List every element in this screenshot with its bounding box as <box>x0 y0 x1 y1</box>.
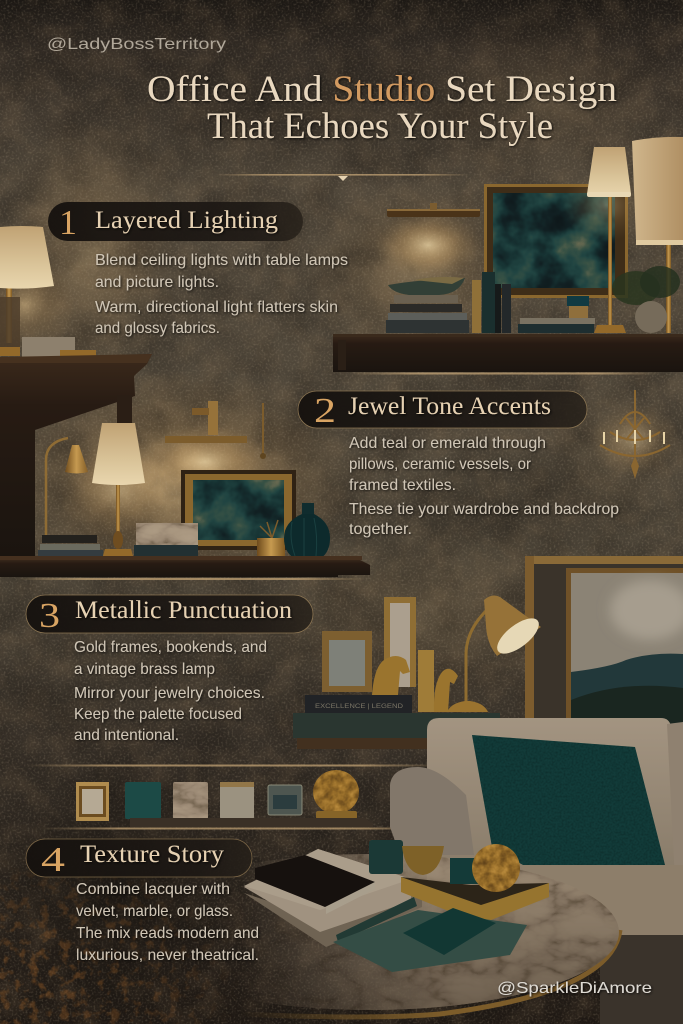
gold sphere <box>313 770 359 819</box>
text: Metallic Punctuation: Gold frames, bookends, and <box>74 639 267 656</box>
slim table lamp <box>562 147 650 333</box>
brass lamp <box>447 596 544 712</box>
text: Jewel Tone Accents: Add teal or emerald through <box>349 435 546 452</box>
text: Jewel Tone Accents: These tie your wardrobe and backdrop <box>349 501 619 518</box>
green book strip <box>336 897 417 942</box>
material swatches row <box>76 770 373 827</box>
rule above swatches <box>25 764 445 766</box>
right cushion <box>667 722 683 882</box>
scene: middle left lit vignette <box>0 401 370 577</box>
pill: 3 Metallic Punctuation: 3 <box>39 596 60 635</box>
teal glass <box>369 840 403 874</box>
brass bowl <box>402 846 444 875</box>
pill: 3 Metallic Punctuation <box>26 595 313 635</box>
scene: left lamp and corner shelf <box>0 226 152 560</box>
text: Texture Story: Combine lacquer with <box>76 881 230 898</box>
scene: large framed painting <box>525 556 683 726</box>
books under frames <box>305 695 412 713</box>
teal swatch <box>125 782 161 819</box>
text: Layered Lighting: and glossy fabrics. <box>95 320 220 337</box>
small gold frame <box>322 631 372 692</box>
rule under middle shelf <box>15 578 365 580</box>
back cushion <box>427 718 683 882</box>
picture light <box>374 203 482 279</box>
gold horse bookends <box>372 650 458 712</box>
title <box>147 69 617 147</box>
text: Layered Lighting <box>95 252 348 337</box>
marble block and brass items <box>22 337 96 357</box>
table lamp <box>0 226 75 356</box>
dark velvet fold <box>403 908 496 955</box>
shelf <box>333 334 683 372</box>
corner wood shelf <box>0 354 152 560</box>
books under frames: EXCELLENCE | LEGEND <box>315 704 404 710</box>
text: Jewel Tone Accents: together. <box>349 521 412 538</box>
text: Layered Lighting: Blend ceiling lights with table lamps <box>95 252 348 269</box>
framed teal painting <box>484 184 628 298</box>
upright books <box>472 272 511 333</box>
tall gold frame <box>384 597 416 687</box>
teal velvet pillow <box>472 735 665 865</box>
green slab and shelf <box>293 713 500 749</box>
ribbed teal vase <box>284 503 330 558</box>
stacked books and bowl <box>386 277 469 333</box>
text: Layered Lighting: Warm, directional light flatters skin <box>95 299 338 316</box>
chandelier <box>589 390 681 479</box>
wood shelf <box>0 556 370 577</box>
pill: 2 Jewel Tone Accents: Jewel Tone Accents <box>348 393 551 420</box>
pill: 1 Layered Lighting: 1 <box>59 203 77 242</box>
speckled vase <box>635 301 667 333</box>
pill: 2 Jewel Tone Accents <box>298 391 587 430</box>
flat books and teal candle <box>518 296 595 333</box>
text: Metallic Punctuation: Keep the palette focused <box>74 706 242 723</box>
gold egg <box>472 844 520 892</box>
rule below swatches <box>40 828 440 830</box>
plant <box>612 266 680 305</box>
pill: 1 Layered Lighting: Layered Lighting <box>95 207 279 234</box>
large lamp <box>632 137 683 333</box>
handle: LadyBossTerritory: @LadyBossTerritory <box>47 36 226 53</box>
marble swatch <box>173 782 208 819</box>
gold frame swatch <box>76 782 109 821</box>
pill: 3 Metallic Punctuation: Metallic Punctuation <box>75 597 293 624</box>
marble tabletop <box>256 854 619 1010</box>
marble block on books <box>134 523 198 558</box>
text: Jewel Tone Accents: pillows, ceramic vessels, or <box>349 456 532 473</box>
swatch shelf <box>130 818 373 827</box>
text: Metallic Punctuation <box>74 639 267 744</box>
scene: upper right shelf with art and lamps <box>333 137 683 372</box>
gold tray <box>401 877 549 924</box>
brass cup with twigs <box>257 520 285 558</box>
arm <box>390 767 474 855</box>
pill: 2 Jewel Tone Accents: 2 <box>314 391 336 430</box>
text: Texture Story: luxurious, never theatrical. <box>76 947 259 964</box>
title divider <box>215 174 470 181</box>
text: Jewel Tone Accents: framed textiles. <box>349 477 456 494</box>
pleated table lamp <box>58 423 178 556</box>
text: Texture Story <box>76 881 259 964</box>
book stacks <box>38 535 103 558</box>
scene: sofa <box>390 718 683 1024</box>
pill: 4 Texture Story: 4 <box>41 840 65 879</box>
handle: SparkleDiAmore: @SparkleDiAmore <box>497 980 652 997</box>
green fabric swatch <box>333 910 527 972</box>
marble slabs <box>244 849 422 947</box>
text: Texture Story: velvet, marble, or glass. <box>76 903 233 920</box>
title: Office And Studio Set Design <box>147 69 617 110</box>
glass swatch <box>268 785 302 815</box>
scene: metallic objects shelf <box>293 596 544 749</box>
teal object on tray <box>450 858 490 884</box>
black book <box>255 855 375 914</box>
pill: 4 Texture Story <box>26 839 252 879</box>
text: Jewel Tone Accents <box>349 435 619 538</box>
text: Layered Lighting: and picture lights. <box>95 274 219 291</box>
scene: marble table with styled objects <box>244 840 622 1020</box>
text: Metallic Punctuation: a vintage brass lamp <box>74 661 215 678</box>
stone swatch <box>220 782 254 819</box>
text: Metallic Punctuation: and intentional. <box>74 727 179 744</box>
pill: 4 Texture Story: Texture Story <box>80 841 225 868</box>
arc lamp <box>46 438 88 535</box>
seat <box>520 865 683 935</box>
text: Metallic Punctuation: Mirror your jewelry choices. <box>74 685 265 702</box>
pill: 1 Layered Lighting <box>48 202 303 242</box>
table rim <box>240 930 620 1017</box>
rule under upper shelf <box>350 372 660 374</box>
framed teal textile <box>181 470 296 550</box>
title: That Echoes Your Style <box>207 106 553 147</box>
wall sconce <box>139 401 271 498</box>
text: Texture Story: The mix reads modern and <box>76 925 259 942</box>
